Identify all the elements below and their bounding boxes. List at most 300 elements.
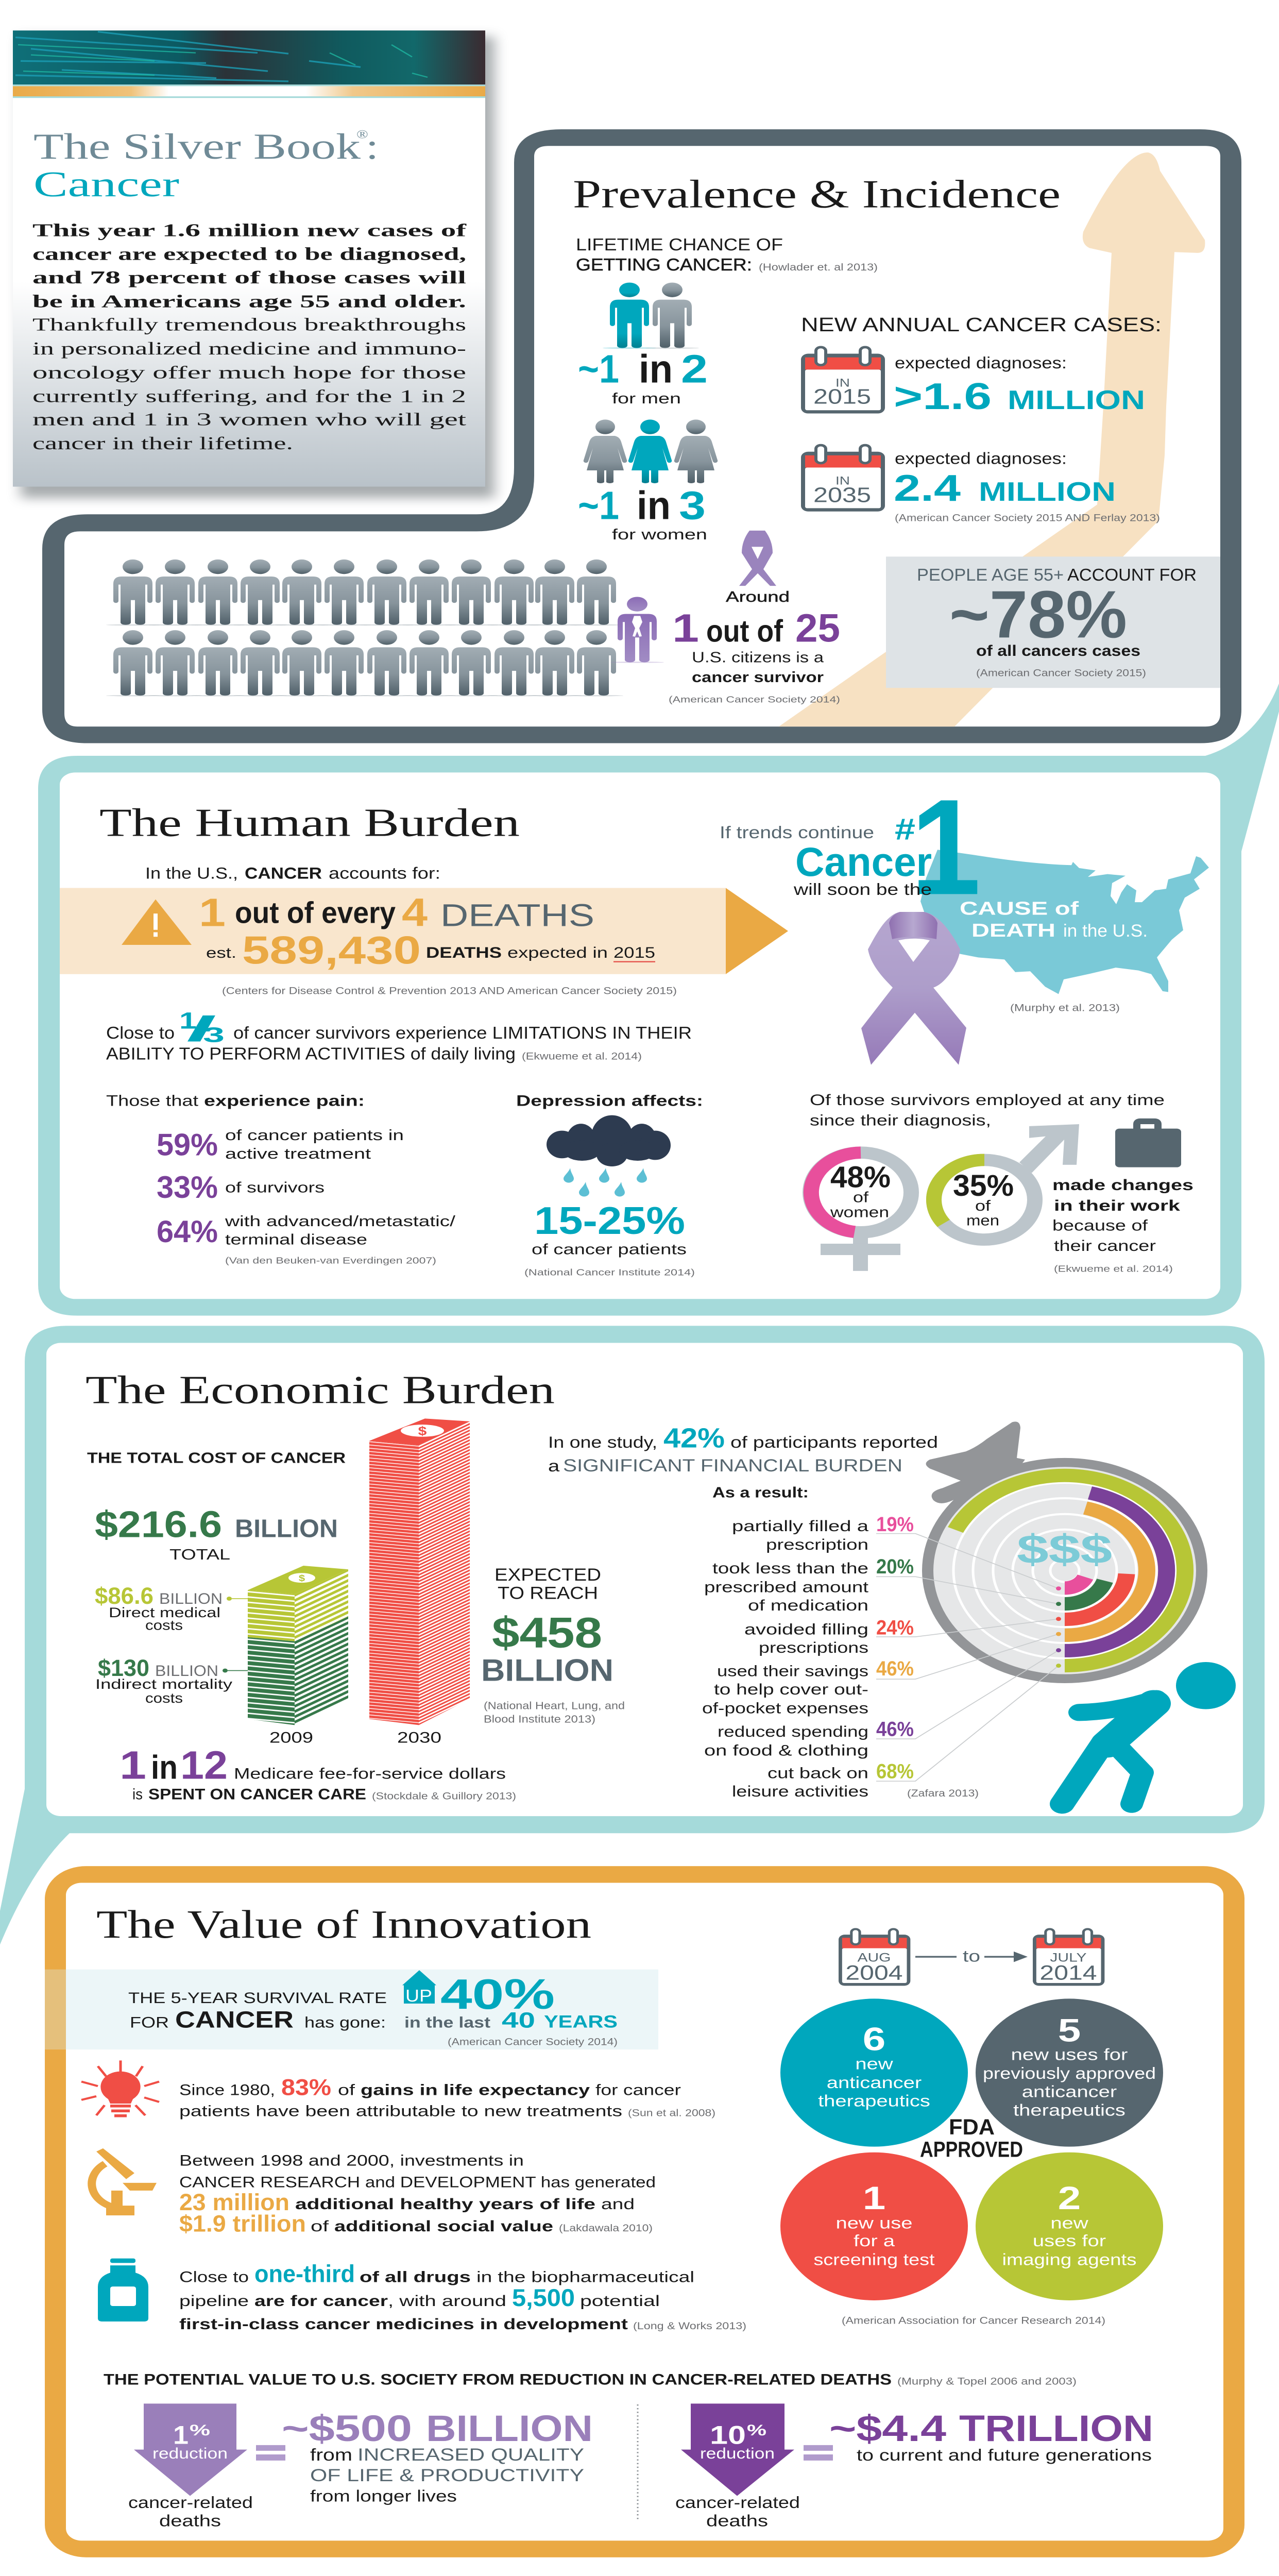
panel: value of innovation border [45, 1866, 1244, 2557]
band: five year survival rate: THE 5-YEAR SURVIVAL RATE [128, 1990, 387, 2007]
label: FDA approved: FDA [949, 2115, 995, 2140]
text: drugs in the pipeline: , with around [388, 2293, 506, 2310]
column: experience pain: 33% [157, 1170, 218, 1205]
chart legend: results list: prescribed amount [704, 1579, 869, 1596]
label: FDA approved: APPROVED [920, 2138, 1023, 2162]
stat: 1 in 3 women: in [637, 483, 671, 528]
band: 1 out of every 4 deaths: out of every [235, 896, 396, 929]
text: drugs in the pipeline: pipeline [179, 2293, 249, 2310]
column: survivors employed: made changes [1052, 1177, 1193, 1194]
heading: the value of innovation: The Value of Innovation [96, 1903, 591, 1947]
chart legend: results list [702, 1513, 1061, 1800]
text: financial burden study: As a result: [712, 1484, 809, 1501]
callout: cancer will be number 1: DEATH [971, 920, 1055, 941]
stat: 2.4 million: MILLION [979, 477, 1116, 507]
circle: screening test: for a [854, 2231, 895, 2250]
text: drugs in the pipeline: of all drugs [360, 2268, 471, 2285]
stat: direct medical costs: $86.6 [95, 1583, 154, 1609]
callout: cancer will be number 1: # [895, 813, 915, 846]
text: financial burden study: In one study, [548, 1433, 657, 1451]
icon: calendar 2035: 2035 [813, 483, 871, 506]
callout: cancer will be number 1 [720, 771, 1148, 1013]
icon: calendar 2015: 2015 [813, 385, 871, 408]
divider [637, 2404, 639, 2521]
text: lifetime chance: (Howlader et. al 2013) [759, 261, 878, 273]
icon: women [584, 419, 718, 483]
band: 1 out of every 4 deaths: 2015 [613, 944, 655, 961]
circle: screening test: 1 [863, 2180, 885, 2216]
band: five year survival rate: FOR [130, 2014, 169, 2031]
text: financial burden study: of participants reported [730, 1433, 938, 1451]
icon: rain cloud [547, 1115, 671, 1196]
stat: one third limitations: of cancer survivors experience LIMITATIONS IN THEIR [233, 1024, 692, 1043]
card body text: men and 1 in 3 women who will get [32, 410, 466, 429]
stat: 1 in 12 medicare dollars: in [151, 1749, 178, 1786]
stat: 1.6 million: MILLION [1008, 385, 1145, 415]
chart legend: results list: avoided filling [744, 1621, 868, 1638]
heading: the human burden: The Human Burden [99, 801, 520, 845]
column: survivors employed: in their work [1054, 1197, 1181, 1214]
stat: 1 percent reduction: reduction [152, 2445, 228, 2462]
icon: microscope [92, 2148, 157, 2215]
band: five year survival rate: YEARS [544, 2012, 618, 2031]
column: survivors employed: men [966, 1212, 999, 1229]
icon: medicine bottle [98, 2259, 148, 2321]
circle: screening test: screening test [813, 2250, 934, 2268]
arrow: rising trend [779, 152, 1205, 726]
stat: 10 percent reduction: TRILLION [959, 2409, 1153, 2449]
circle: new uses for approved therapeutics: anticancer [1022, 2082, 1117, 2100]
callout: cancer will be number 1: (Murphy et al. 2013) [1010, 1002, 1120, 1013]
stat: 1 in 12 medicare dollars: 12 [180, 1742, 228, 1787]
card body text: oncology offer much hope for those [32, 363, 466, 383]
stat: 1 out of 25: (American Cancer Society 2014) [669, 695, 840, 705]
chart legend: results list: took less than the [712, 1560, 868, 1577]
text: research and development: $1.9 trillion [179, 2211, 306, 2237]
icon: briefcase [1115, 1121, 1181, 1167]
circle: imaging agents: new [1050, 2213, 1089, 2232]
column: survivors employed: women [830, 1204, 889, 1221]
column: experience pain: of cancer patients in [225, 1127, 404, 1143]
text: research and development: 23 million [179, 2189, 289, 2215]
band: five year survival rate: CANCER [175, 2007, 294, 2033]
stat: 1 in 2 men: in [639, 346, 673, 391]
panel: economic burden border [0, 1326, 1265, 1944]
chart legend: results list: prescriptions [759, 1639, 868, 1656]
chart: money stack 2009 [248, 1566, 348, 1725]
chart legend: results list: (Zafara 2013) [907, 1788, 979, 1799]
text: drugs in the pipeline: first-in-class cancer medicines in development [179, 2316, 628, 2333]
text: drugs in the pipeline: one-third [254, 2260, 355, 2287]
stat: 1 out of 25 [669, 589, 840, 705]
timeline: august 2004 to july 2014: 2004 [845, 1961, 903, 1984]
text: research and development [179, 2152, 656, 2237]
heading: potential value to society: (Murphy & Topel 2006 and 2003) [897, 2376, 1077, 2387]
chart legend: results list: of medication [748, 1597, 868, 1614]
card body text: currently suffering, and for the 1 in 2 [32, 386, 466, 406]
circle: new uses for approved therapeutics: 5 [1058, 2012, 1081, 2048]
timeline: august 2004 to july 2014 [839, 1929, 1104, 1986]
stat: 2.4 million: 2.4 [894, 467, 961, 509]
stat: one third limitations: 3 [203, 1023, 225, 1046]
column: survivors employed: since their diagnosis, [810, 1112, 991, 1129]
text: new annual cancer cases: NEW ANNUAL CANCER CASES: [801, 314, 1162, 336]
stat: indirect mortality costs: BILLION [155, 1663, 218, 1680]
label: FDA approved [920, 2115, 1023, 2162]
callout: cancer will be number 1: If trends continue [720, 823, 874, 842]
text: lifetime chance: LIFETIME CHANCE OF [576, 235, 783, 255]
text: gains in life expectancy: for cancer [595, 2081, 681, 2098]
icon: calendar 2035: IN [835, 474, 850, 487]
text: drugs in the pipeline: potential [580, 2293, 660, 2310]
band: five year survival rate: in the last [404, 2014, 490, 2031]
circle: imaging agents: imaging agents [1002, 2250, 1136, 2268]
text: research and development: Between 1998 and 2000, investments in [179, 2152, 524, 2170]
text: drugs in the pipeline [179, 2260, 746, 2333]
icon: up arrow: UP [405, 1987, 432, 2006]
column: survivors employed: Of those survivors employed at any time [810, 1092, 1165, 1109]
stat: 1 in 12 medicare dollars: Medicare fee-for-service dollars [234, 1765, 506, 1783]
icon: calendar 2035 [801, 445, 885, 512]
callout: people age 55+: ACCOUNT FOR [1067, 566, 1197, 585]
text: lifetime chance [576, 235, 878, 275]
column: experience pain: terminal disease [225, 1231, 367, 1248]
stat: 1.6 million: expected diagnoses: [895, 353, 1067, 372]
icon: survivor person [610, 597, 664, 663]
circle: new anticancer therapeutics: therapeutics [818, 2092, 930, 2110]
circle: imaging agents: 2 [1058, 2180, 1081, 2216]
stat: 1 in 12 medicare dollars [120, 1742, 516, 1803]
callout: cancer will be number 1: in the U.S. [1063, 921, 1148, 941]
stat: 10 percent reduction: ~$4.4 [829, 2409, 946, 2449]
heading: prevalence and incidence: Prevalence & Incidence [573, 172, 1061, 216]
band: 1 out of every 4 deaths: 589,430 [242, 929, 421, 972]
text: research and development: CANCER RESEARCH and DEVELOPMENT has generated [179, 2174, 656, 2191]
chart: boulder radial chart [922, 1421, 1207, 1683]
card body text [32, 221, 467, 453]
card body text: This year 1.6 million new cases of [32, 221, 467, 240]
card body text: in personalized medicine and immuno- [32, 338, 466, 359]
chart legend: results list: of-pocket expenses [702, 1700, 868, 1717]
icon: warning triangle [122, 900, 192, 945]
icon: up arrow [402, 1970, 436, 2006]
icon: men [603, 282, 699, 349]
column: survivors employed: because of [1052, 1217, 1148, 1234]
band: five year survival rate: 40% [440, 1971, 555, 2019]
band: five year survival rate: 40 [502, 2008, 535, 2032]
stat: 1 percent reduction: from [310, 2446, 352, 2465]
chart legend: results list: prescription [766, 1536, 868, 1553]
chart labels: years [269, 1729, 441, 1746]
stat: one third limitations: 1 [179, 1008, 197, 1034]
card title: ® [356, 127, 368, 141]
band: 1 out of every 4 deaths: expected in [507, 944, 608, 961]
text: in the U.S. cancer accounts for [145, 863, 440, 882]
chart legend: results list: 24% [876, 1616, 914, 1639]
chart legend: results list: to help cover out- [714, 1681, 868, 1698]
text: research and development: and [601, 2196, 635, 2213]
text: gains in life expectancy: of [338, 2081, 355, 2098]
card body text: be in Americans age 55 and older. [32, 292, 466, 311]
callout: people age 55+: ~78% [949, 577, 1127, 652]
text: in the U.S. cancer accounts for: accounts for: [329, 863, 440, 882]
stat: 1 percent reduction: cancer-related [128, 2493, 253, 2512]
panel: human burden border [38, 684, 1279, 1316]
chart legend: results list: leisure activities [732, 1783, 868, 1800]
stat: 1 percent reduction: BILLION [426, 2409, 593, 2449]
band: 1 out of every 4 deaths [60, 888, 788, 974]
stat: expected to reach 458 billion: TO REACH [498, 1583, 598, 1603]
text: drugs in the pipeline: in the biopharmaceutical [476, 2268, 694, 2285]
column: survivors employed: 35% [953, 1169, 1014, 1202]
text: gains in life expectancy: gains in life expectancy [361, 2081, 590, 2098]
text: financial burden study: SIGNIFICANT FINANCIAL BURDEN [563, 1455, 902, 1476]
text: research and development: (Lakdawala 2010) [559, 2222, 653, 2233]
circle: new anticancer therapeutics: anticancer [827, 2073, 922, 2092]
text: research and development: additional social value [334, 2218, 553, 2235]
column: experience pain: experience pain: [204, 1092, 365, 1109]
stat: 1 in 3 women: ~1 [578, 483, 619, 528]
circle: new uses for approved therapeutics: previously approved [983, 2064, 1156, 2082]
stat: 1.6 million: >1.6 [894, 375, 992, 417]
icon: calendar 2015: IN [835, 377, 850, 389]
chart legend: results list: 68% [876, 1760, 914, 1783]
callout: cancer will be number 1: 1 [911, 771, 981, 923]
map: united states [920, 850, 1209, 994]
icon: person pushing boulder [1062, 1662, 1236, 1804]
text: drugs in the pipeline: (Long & Works 2013) [633, 2320, 746, 2331]
stat: 10 percent reduction [675, 2403, 1153, 2530]
stat: 10 percent reduction: reduction [700, 2445, 775, 2462]
circle: new anticancer therapeutics: 6 [863, 2022, 885, 2058]
chart legend: results list: 46% [876, 1657, 914, 1680]
column: experience pain: Those that [106, 1092, 199, 1109]
chart legend: results list: used their savings [717, 1663, 868, 1680]
stat: 1 in 2 men: ~1 [578, 346, 619, 391]
stat: 1 out of 25: 25 [795, 605, 840, 650]
band: five year survival rate [45, 1970, 658, 2049]
card title: The Silver Book [33, 126, 361, 167]
callout: cancer will be number 1: Cancer [795, 839, 932, 885]
stat: indirect mortality costs: $130 [98, 1655, 149, 1681]
cover image [13, 30, 485, 98]
chart: money stack 2030 [369, 1418, 470, 1725]
panel: prevalence and incidence border [42, 129, 1241, 743]
stat: one third limitations: / [186, 1010, 216, 1048]
stat: 1 out of 25: Around [726, 589, 790, 605]
stat: expected to reach 458 billion: (National Heart, Lung, and [484, 1700, 625, 1711]
column: survivors employed: their cancer [1054, 1238, 1156, 1255]
stat: 1 percent reduction: 1 [173, 2421, 189, 2450]
stat: 10 percent reduction: 10 [710, 2421, 746, 2450]
heading: the economic burden: The Economic Burden [86, 1368, 555, 1412]
stat: 1 in 12 medicare dollars: SPENT ON CANCER CARE [148, 1786, 366, 1803]
column: experience pain: 59% [157, 1127, 218, 1162]
column: experience pain: of survivors [225, 1179, 325, 1196]
circle: new anticancer therapeutics: new [855, 2055, 894, 2073]
stat: indirect mortality costs [95, 1655, 248, 1706]
circle: new uses for approved therapeutics: new uses for [1011, 2045, 1128, 2064]
stat: direct medical costs [95, 1583, 248, 1633]
stat: expected to reach 458 billion: EXPECTED [494, 1565, 601, 1585]
chart legend: results list: on food & clothing [704, 1742, 868, 1759]
stat: 1 percent reduction: deaths [159, 2512, 221, 2530]
chart legend: results list: cut back on [768, 1765, 868, 1782]
column: depression: of cancer patients [532, 1241, 687, 1258]
text: gains in life expectancy: Since 1980, [179, 2081, 275, 2098]
band: 1 out of every 4 deaths: DEATHS [426, 944, 502, 961]
column: depression: 15-25% [534, 1199, 685, 1243]
callout: cancer will be number 1: will soon be the [793, 880, 932, 899]
column: experience pain: (Van den Beuken-van Everdingen 2007) [225, 1256, 436, 1266]
stat: 216.6 billion total: TOTAL [169, 1547, 230, 1563]
timeline: august 2004 to july 2014: AUG [858, 1951, 891, 1964]
stat: 1 percent reduction [128, 2403, 593, 2530]
stat: 2.4 million [894, 449, 1160, 523]
stat: 1 percent reduction: OF LIFE & PRODUCTIVITY [310, 2465, 584, 2485]
stat: 216.6 billion total: $216.6 [95, 1503, 222, 1546]
circle: imaging agents [976, 2153, 1163, 2300]
stat: one third limitations: Close to [106, 1024, 175, 1043]
column: experience pain: active treatment [225, 1146, 371, 1162]
column: survivors employed: 48% [830, 1161, 891, 1194]
callout: cancer will be number 1: CAUSE of [960, 897, 1079, 919]
stat: 1 out of 25: U.S. citizens is a [692, 649, 824, 666]
text: financial burden study: 42% [663, 1422, 725, 1453]
stat: 10 percent reduction: cancer-related [675, 2493, 800, 2512]
stat: 2.4 million: expected diagnoses: [895, 449, 1067, 467]
circle: screening test [780, 2153, 968, 2300]
chart labels: years: 2030 [397, 1729, 441, 1746]
circle: new uses for approved therapeutics [976, 1998, 1163, 2147]
callout: people age 55+ [886, 556, 1220, 688]
stat: indirect mortality costs: Indirect mortality [95, 1676, 233, 1692]
card body text: and 78 percent of those cases will [32, 267, 466, 287]
stat: 1 percent reduction: % [190, 2422, 210, 2439]
stat: 1 in 12 medicare dollars: is [132, 1786, 143, 1803]
chart: money stack 2030: $ [418, 1425, 427, 1438]
callout: people age 55+: (American Cancer Society 2015) [976, 667, 1146, 679]
card body text: Thankfully tremendous breakthroughs [32, 315, 466, 334]
callout: people age 55+: PEOPLE AGE 55+ [917, 566, 1064, 585]
stat: 1 out of 25: out of [706, 614, 783, 648]
callout: people age 55+: of all cancers cases [976, 642, 1140, 659]
column: depression [516, 1092, 703, 1278]
heading: potential value to society: THE POTENTIAL VALUE TO U.S. SOCIETY FROM REDUCTION IN CANCER-RELATED DEATHS [104, 2371, 892, 2388]
circle: new anticancer therapeutics [780, 1998, 968, 2147]
column: survivors employed: (Ekwueme et al. 2014) [1054, 1264, 1173, 1274]
citation: approvals: (American Association for Cancer Research 2014) [842, 2315, 1105, 2326]
stat: expected to reach 458 billion: $458 [492, 1609, 602, 1657]
chart: boulder radial chart: $$$ [1017, 1527, 1112, 1572]
circle: new uses for approved therapeutics: therapeutics [1013, 2101, 1125, 2120]
circle: imaging agents: uses for [1033, 2231, 1106, 2250]
stat: one third limitations: ABILITY TO PERFORM ACTIVITIES of daily living [106, 1045, 516, 1063]
stat: 1.6 million [894, 353, 1145, 417]
timeline: august 2004 to july 2014: 2014 [1039, 1961, 1097, 1984]
stat: 216.6 billion total [95, 1503, 338, 1563]
stat: 1 in 2 men [578, 346, 708, 406]
column: survivors employed: of [853, 1189, 869, 1206]
timeline: august 2004 to july 2014: to [963, 1947, 980, 1965]
text: financial burden study [548, 1422, 938, 1501]
stat: expected to reach 458 billion: Blood Institute 2013) [484, 1713, 595, 1725]
chart legend: results list: 20% [876, 1555, 914, 1578]
text: drugs in the pipeline: Close to [179, 2268, 249, 2285]
band: five year survival rate: has gone: [304, 2014, 386, 2031]
stat: 1 in 3 women: 3 [679, 483, 706, 528]
card body text: cancer are expected to be diagnosed, [32, 244, 466, 264]
stat: 10 percent reduction: deaths [706, 2512, 768, 2530]
stat: 1 percent reduction: from longer lives [310, 2487, 457, 2505]
text: research and development: of [311, 2218, 329, 2235]
text: gains in life expectancy: (Sun et al. 2008) [628, 2107, 715, 2119]
stat: 216.6 billion total: BILLION [235, 1514, 338, 1543]
circle: screening test: new use [836, 2213, 912, 2232]
chart legend: results list: reduced spending [718, 1723, 868, 1740]
text: research and development: additional healthy years of life [295, 2196, 595, 2213]
column: depression: Depression affects: [516, 1092, 703, 1109]
text: in the U.S. cancer accounts for: In the U.S., [145, 863, 238, 882]
text: gains in life expectancy [179, 2074, 715, 2120]
icon: large awareness ribbon [861, 912, 966, 1065]
stat: 1 in 12 medicare dollars: (Stockdale & Guillory 2013) [372, 1790, 516, 1802]
stat: 1 in 2 men: for men [612, 390, 681, 406]
stat: 1 percent reduction: INCREASED QUALITY [357, 2445, 584, 2465]
stat: 1 in 3 women [578, 483, 707, 543]
card body text: cancer in their lifetime. [32, 433, 293, 453]
stat: 1 in 2 men: 2 [681, 346, 708, 391]
card title [33, 126, 379, 205]
text: lifetime chance: GETTING CANCER: [576, 256, 752, 275]
column: experience pain [106, 1092, 455, 1266]
band: 1 out of every 4 deaths: DEATHS [440, 897, 594, 933]
stat: expected to reach 458 billion [481, 1565, 625, 1725]
card title: Cancer [33, 165, 179, 205]
stat: one third limitations: (Ekwueme et al. 2014) [522, 1050, 642, 1062]
column: experience pain: 64% [157, 1214, 218, 1249]
stat: 1 in 12 medicare dollars: 1 [120, 1742, 146, 1787]
chart legend: results list: 46% [876, 1718, 914, 1740]
icon: small awareness ribbon [739, 531, 776, 586]
timeline: august 2004 to july 2014: JULY [1050, 1951, 1087, 1964]
band: 1 out of every 4 deaths: 1 [199, 890, 226, 935]
icon: male symbol donut [934, 1124, 1079, 1240]
stat: 1 in 3 women: for women [612, 527, 707, 543]
chart: money stack 2009: $ [299, 1573, 305, 1583]
band: five year survival rate: (American Cancer Society 2014) [448, 2036, 618, 2047]
stat: direct medical costs: costs [145, 1618, 183, 1633]
citation: deaths: (Centers for Disease Control & Prevention 2013 AND American Cancer Society 2015) [222, 985, 677, 996]
stat: 1 percent reduction: ~$500 [282, 2409, 412, 2449]
column: survivors employed [810, 1092, 1193, 1274]
chart legend: results list: 19% [876, 1513, 914, 1536]
text: gains in life expectancy: patients have been attributable to new treatments [179, 2103, 622, 2120]
icon: rows of people [106, 560, 623, 696]
chart labels: years: 2009 [269, 1729, 313, 1746]
stat: expected to reach 458 billion: BILLION [481, 1653, 613, 1687]
stat: 1 out of 25: cancer survivor [692, 669, 824, 685]
text: financial burden study: a [548, 1456, 560, 1475]
stat: 10 percent reduction: to current and future generations [857, 2446, 1152, 2464]
text: gains in life expectancy: 83% [281, 2074, 331, 2100]
text: drugs in the pipeline: 5,500 [512, 2284, 575, 2312]
column: survivors employed: of [975, 1198, 991, 1214]
text: in the U.S. cancer accounts for: CANCER [245, 863, 322, 882]
stat: direct medical costs: Direct medical [109, 1605, 220, 1620]
icon: light bulb [81, 2060, 159, 2116]
text: drugs in the pipeline: are for cancer [254, 2293, 388, 2310]
